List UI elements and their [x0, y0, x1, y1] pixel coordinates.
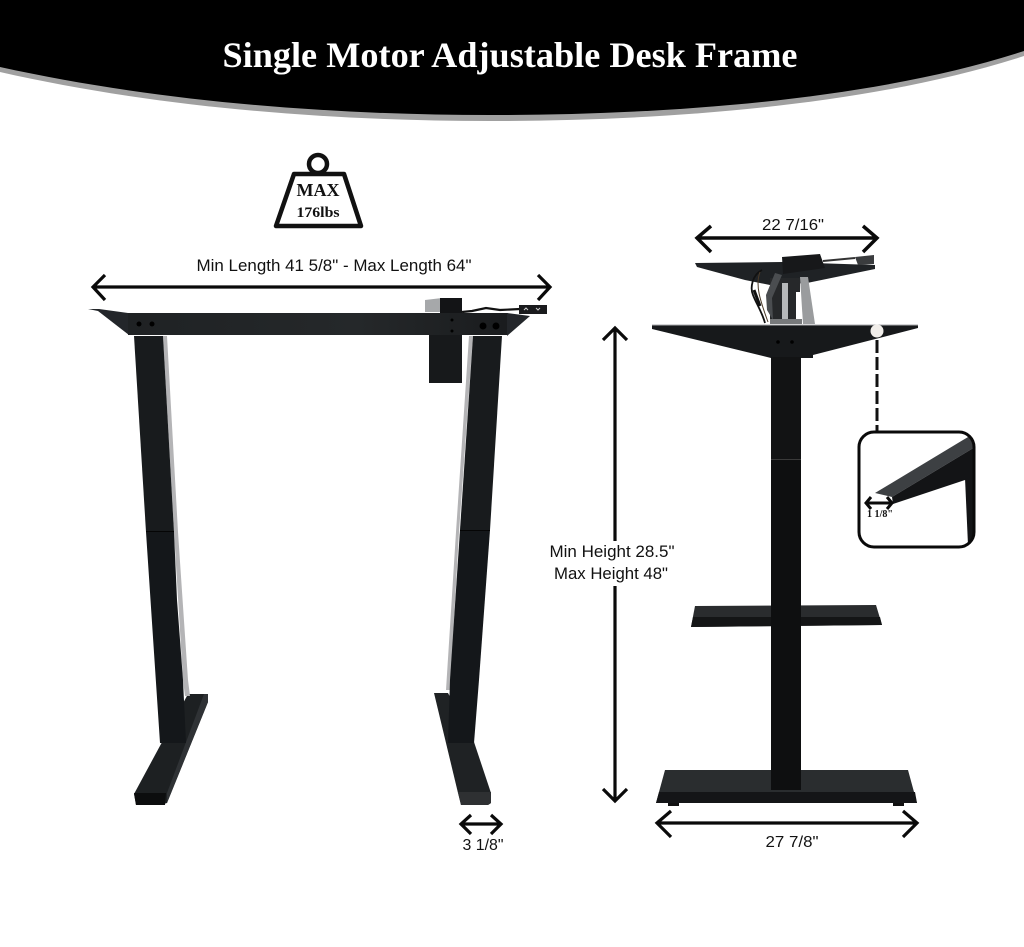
arrow: base width — [657, 811, 917, 837]
icon: max weight 176lbs — [276, 155, 361, 226]
foot width label: 3 1/8" — [462, 837, 504, 854]
height label — [550, 543, 675, 583]
inset plate photo — [875, 433, 975, 545]
dashed connector — [876, 340, 878, 431]
height label: Min Height 28.5" — [550, 543, 675, 561]
cable side — [823, 258, 855, 261]
base foot — [656, 770, 917, 806]
column — [771, 357, 801, 790]
inset detail — [859, 432, 975, 547]
top width label: 22 7/16" — [762, 217, 824, 234]
left leg — [134, 336, 190, 743]
base width label: 27 7/8" — [766, 834, 818, 851]
arrow: foot width — [461, 815, 501, 834]
arrow: height — [603, 328, 627, 801]
arrow: top plate width — [697, 226, 877, 252]
arrow: desk length — [93, 275, 550, 300]
icon: max weight 176lbs: MAX — [296, 180, 340, 200]
upper mount plate — [695, 262, 875, 285]
controller side — [855, 255, 874, 265]
title: Single Motor Adjustable Desk Frame — [222, 35, 798, 75]
front view desk frame — [88, 298, 547, 805]
lower mount plate — [652, 325, 918, 358]
left foot — [134, 694, 208, 805]
marker dot — [870, 324, 884, 338]
motor housing — [429, 335, 462, 383]
arrow: flange width — [866, 497, 892, 509]
lift mechanism — [752, 270, 815, 324]
side view desk frame — [652, 254, 918, 806]
control box side — [782, 254, 825, 274]
right foot — [434, 693, 491, 805]
height label: Max Height 48" — [554, 565, 668, 583]
cable — [462, 308, 520, 312]
icon: max weight 176lbs: 176lbs — [296, 205, 340, 221]
top beam — [88, 309, 530, 336]
length label: Min Length 41 5/8" - Max Length 64" — [196, 257, 472, 275]
control box — [425, 298, 462, 313]
flange width label: 1 1/8" — [867, 509, 893, 520]
inset frame — [859, 432, 974, 547]
right leg — [446, 336, 502, 743]
hand controller — [519, 305, 547, 314]
header banner — [0, 0, 1024, 121]
middle foot — [691, 605, 882, 627]
